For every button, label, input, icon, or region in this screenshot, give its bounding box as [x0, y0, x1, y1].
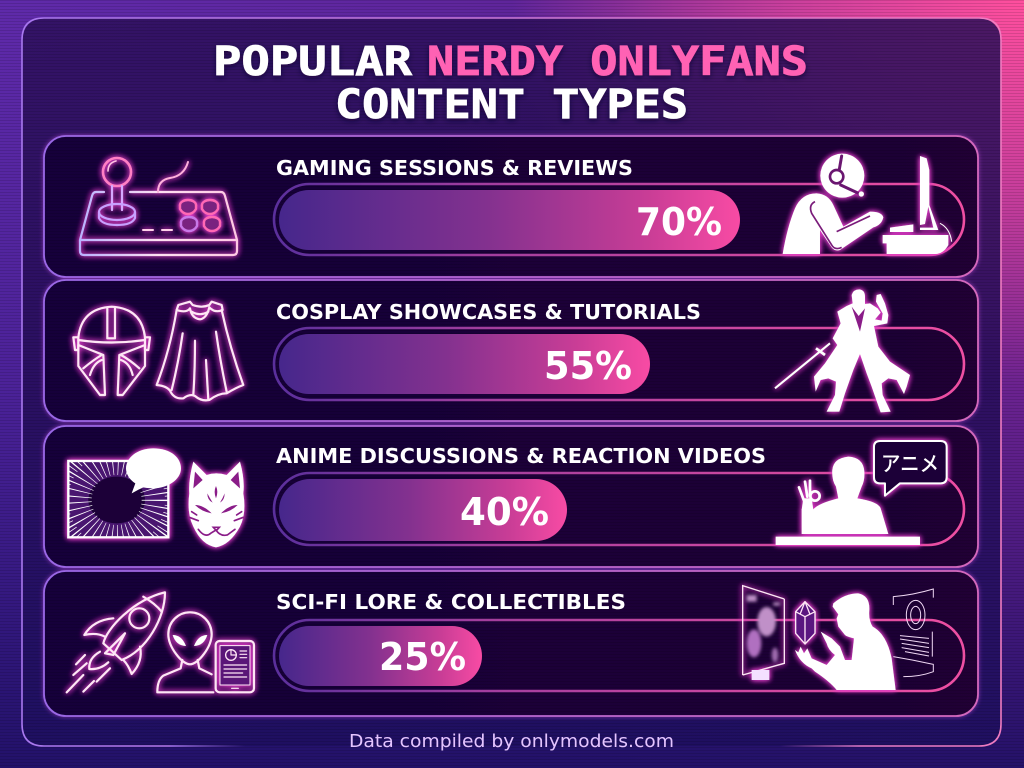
panel: anime	[44, 426, 978, 570]
panel: cosplay	[44, 280, 978, 421]
title: POPULAR	[213, 39, 413, 85]
bar track: cosplay	[274, 328, 964, 400]
footer source credit: Data compiled by onlymodels.com	[349, 731, 674, 752]
bar track: anime	[274, 473, 964, 545]
bar track: gaming	[274, 184, 964, 255]
value: 55%: 55%	[544, 344, 632, 388]
bar: gaming 70%	[279, 190, 740, 250]
value: 70%: 70%	[636, 200, 722, 244]
label: cosplay: COSPLAY SHOWCASES & TUTORIALS	[276, 300, 701, 324]
value: 25%: 25%	[379, 635, 466, 679]
icon: gamer silhouette	[783, 154, 952, 254]
icon: anime reviewer silhouette	[776, 441, 947, 545]
title	[213, 39, 808, 128]
bar: anime 40%	[279, 479, 567, 541]
bar: sci-fi 25%	[279, 626, 482, 686]
label: anime: ANIME DISCUSSIONS & REACTION VIDEOS	[276, 444, 766, 468]
icon: manga panel, speech bubble and fox mask	[62, 443, 250, 552]
icon: arcade stick	[80, 158, 237, 255]
value: 40%: 40%	[460, 490, 549, 534]
icon: rocket, alien and tablet	[67, 592, 254, 692]
icon: cosplay character silhouette	[775, 289, 910, 412]
panel: sci-fi	[44, 571, 978, 716]
label: sci-fi: SCI-FI LORE & COLLECTIBLES	[276, 590, 626, 614]
title: CONTENT TYPES	[335, 82, 688, 128]
label: gaming: GAMING SESSIONS & REVIEWS	[276, 156, 633, 180]
icon: sci-fi collector with holograms	[743, 586, 933, 690]
speech bubble text: アニメ	[881, 453, 939, 476]
panel: gaming	[44, 136, 978, 277]
title: NERDY ONLYFANS	[427, 39, 808, 85]
bar: cosplay 55%	[279, 334, 650, 394]
bar track: sci-fi	[274, 620, 964, 691]
icon: helmet and cape	[73, 302, 243, 400]
